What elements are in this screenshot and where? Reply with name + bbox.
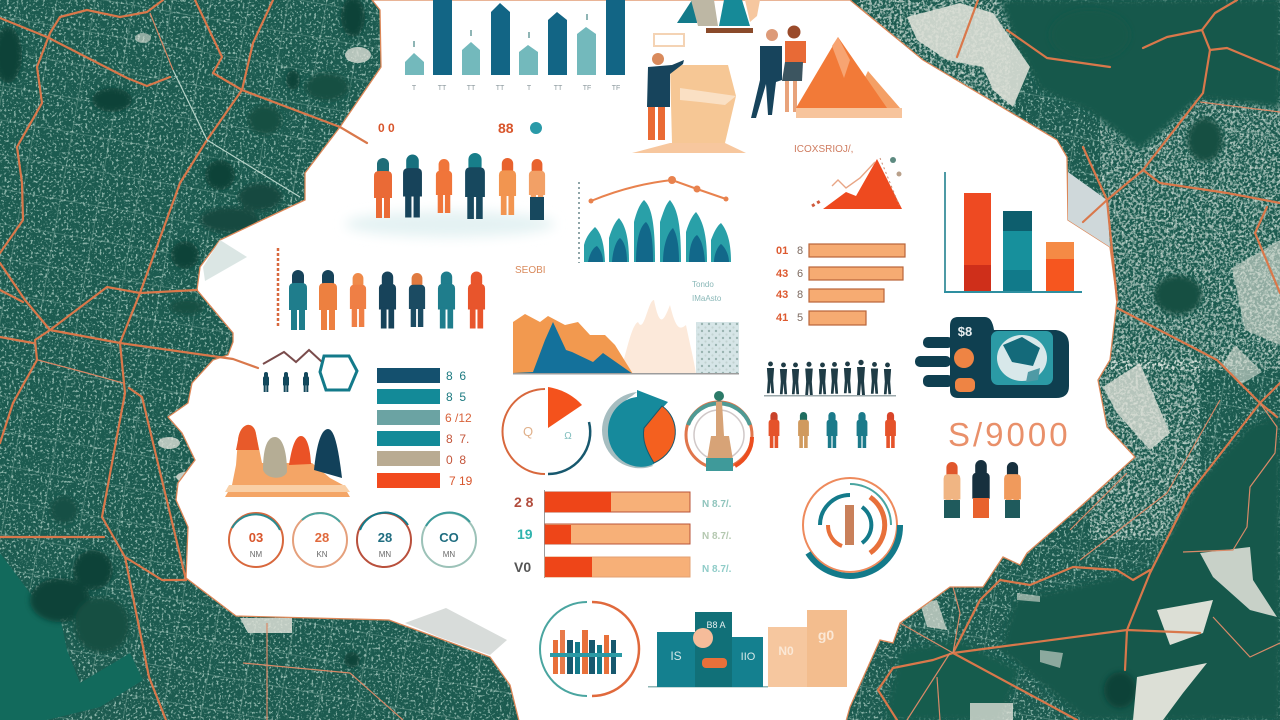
panel: metric circles — [229, 512, 476, 567]
panel: metric circles: 28 — [315, 530, 329, 545]
panel: top bar chart: TT — [467, 85, 476, 92]
panel: area chart with labels: IMaAsto — [692, 294, 722, 303]
illustration: couple — [751, 26, 806, 118]
panel: circular crowd badge — [540, 602, 639, 696]
panel: small figures with hexagon — [263, 350, 357, 392]
panel: metric circles: CO — [439, 530, 459, 545]
panel: stacked legend bars: 8 5 — [446, 390, 466, 404]
panel: peaks chart — [225, 425, 350, 497]
panel: arched chart with trend line — [579, 176, 731, 263]
panel: orange horizontal bars: 41 — [776, 312, 788, 324]
panel: metric circles: KN — [316, 550, 328, 559]
panel: stacked legend bars: 7 19 — [449, 474, 473, 488]
panel: mini title and red peak chart: ICOXSRIOJ/, — [794, 144, 853, 155]
panel: pie with red wedge: Q — [523, 424, 533, 439]
solid dark forest, upper right — [1000, 0, 1280, 150]
panel: top bar chart: TF — [583, 85, 591, 92]
panel: horizontal progress bars: 19 — [517, 526, 533, 542]
illustration: orange mountain — [796, 37, 902, 118]
panel: horizontal progress bars: N 8.7/. — [702, 531, 732, 542]
panel: building blocks: B8 A — [706, 620, 726, 630]
panel: crowd row with shadow — [345, 120, 555, 237]
panel: building blocks: g0 — [818, 627, 834, 643]
panel: people with dotted axis — [278, 248, 485, 330]
panel: crowd row with shadow: 0 0 — [378, 121, 395, 135]
panel: area chart with labels — [513, 265, 739, 374]
panel: top bar chart: TT — [496, 85, 505, 92]
panel: building blocks: N0 — [778, 644, 794, 658]
panel: orange horizontal bars — [776, 244, 905, 325]
panel: top bar chart: TT — [554, 85, 563, 92]
map: grey coastal patches — [203, 172, 1110, 655]
panel: top bar chart: T — [527, 85, 532, 92]
panel: building blocks: IIO — [741, 651, 756, 663]
panel: metric circles: 03 — [249, 530, 263, 545]
panel: orange horizontal bars: 5 — [797, 312, 803, 324]
water, lower left — [0, 553, 143, 720]
panel: orange horizontal bars: 8 — [797, 245, 803, 257]
solid dark forest, lower right — [1000, 415, 1280, 720]
panel: crowd row with shadow: 88 — [498, 120, 514, 136]
panel: horizontal progress bars: N 8.7/. — [702, 499, 732, 510]
panel: row of small figures — [769, 412, 896, 448]
panel: top bar chart: T — [412, 85, 417, 92]
panel: top bar chart: TF — [612, 85, 620, 92]
icon: device with globe: $8 — [958, 324, 972, 339]
panel: horizontal progress bars: V0 — [514, 559, 531, 575]
panel: building blocks: IS — [670, 649, 682, 663]
panel: orange horizontal bars: 6 — [797, 268, 803, 280]
illustration: person at podium — [632, 34, 746, 153]
panel: orange horizontal bars: 01 — [776, 245, 788, 257]
panel: three people under value — [944, 460, 1021, 518]
panel: building blocks — [648, 610, 847, 688]
icon: device with globe — [915, 317, 1069, 398]
panel: metric circles: MN — [379, 550, 391, 559]
panel: metric circles: NM — [250, 550, 263, 559]
panel: orange horizontal bars: 8 — [797, 289, 803, 301]
callout: big value: S/9000 — [948, 416, 1071, 453]
illustration: top tents — [677, 0, 760, 33]
panel: top bar chart — [405, 0, 625, 92]
panel: stacked legend bars: 0 8 — [446, 453, 466, 467]
panel: orange horizontal bars: 43 — [776, 289, 788, 301]
panel: marching crowd silhouettes — [764, 360, 896, 396]
panel: mini title and red peak chart — [794, 144, 902, 209]
panel: orange horizontal bars: 43 — [776, 268, 788, 280]
central white area — [168, 0, 1135, 720]
panel: stacked legend bars — [377, 368, 473, 488]
panel: pie with red wedge: Ω — [564, 431, 572, 442]
map: pale road — [173, 70, 300, 197]
panel: metric circles: 28 — [378, 530, 392, 545]
panel: stacked legend bars: 6 /12 — [445, 411, 472, 425]
panel: area chart with labels: SEOBI — [515, 265, 546, 276]
panel: teal and orange donut — [602, 390, 675, 468]
panel: pie with red wedge — [502, 387, 590, 474]
panel: ringed figure — [686, 391, 752, 471]
panel: horizontal progress bars: 2 8 — [514, 494, 534, 510]
panel: stacked legend bars: 8 7. — [446, 432, 469, 446]
panel: area chart with labels: Tondo — [692, 280, 714, 289]
panel: metric circles: MN — [443, 550, 455, 559]
panel: three column bar chart — [944, 172, 1082, 293]
panel: concentric target — [803, 478, 900, 576]
panel: top bar chart: TT — [438, 85, 447, 92]
panel: horizontal progress bars — [514, 490, 732, 578]
panel: horizontal progress bars: N 8.7/. — [702, 564, 732, 575]
panel: stacked legend bars: 8 6 — [446, 369, 466, 383]
